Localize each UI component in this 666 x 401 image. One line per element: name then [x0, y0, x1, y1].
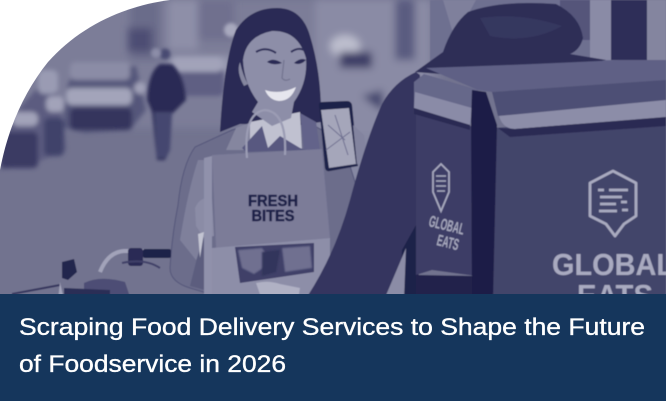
smartphone — [320, 100, 358, 172]
woman: face and neck — [239, 31, 306, 126]
woman: hand and greens — [195, 126, 306, 258]
delivery backpack: GLOBAL — [427, 213, 466, 239]
background lights — [151, 23, 238, 58]
blurred parked cars — [0, 58, 224, 170]
background columns upper right — [430, 0, 666, 62]
paper bag — [204, 110, 330, 300]
delivery backpack: EATS — [435, 232, 461, 254]
backpack strap — [471, 90, 497, 300]
side logo — [433, 164, 449, 211]
woman: collar and shirt — [226, 112, 320, 150]
blurred pedestrian — [147, 48, 186, 160]
title line 2: of Foodservice in 2026 — [19, 351, 286, 378]
title banner — [0, 294, 666, 401]
backpack lid — [426, 60, 666, 92]
woman: hair — [220, 8, 321, 132]
paper bag: BITES — [252, 208, 295, 225]
bag label: FRESH — [248, 193, 298, 210]
title line 1: Scraping Food Delivery Services to Shape the Future — [19, 314, 645, 341]
blurred street background — [0, 0, 666, 320]
courier: head and jacket — [305, 0, 606, 300]
bicycle handlebar — [12, 248, 172, 294]
bag photo — [235, 243, 314, 283]
courier hand under bag — [256, 282, 300, 294]
delivery backpack: EATS — [577, 278, 653, 313]
woman: coat — [170, 118, 356, 294]
blurred background right of woman — [315, 0, 430, 180]
delivery backpack — [414, 60, 666, 313]
back logo — [590, 171, 636, 236]
